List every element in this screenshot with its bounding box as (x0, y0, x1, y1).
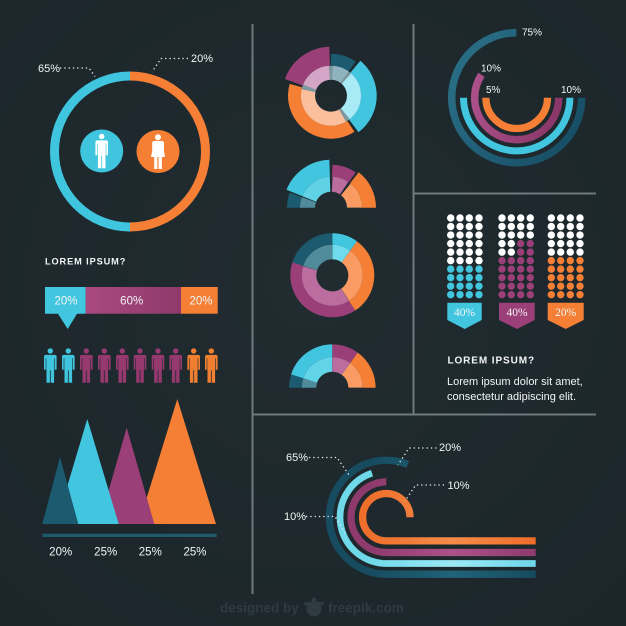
bar segment 20% orange (181, 287, 218, 314)
bar labels: 60% (120, 295, 143, 307)
footer credit (220, 598, 404, 616)
dot column 2 (502, 218, 530, 295)
triangle labels: 25% (94, 547, 117, 559)
callout: 10% right (405, 480, 470, 501)
bar labels (54, 295, 213, 307)
donut chart 3 (282, 225, 383, 326)
half donut chart 4 (281, 336, 384, 439)
arc: magenta (475, 56, 559, 140)
heading: lorem ipsum right: LOREM IPSUM? (448, 356, 535, 366)
callout: 20%: 20% (191, 53, 213, 65)
footer credit: freepik.com (328, 600, 404, 616)
ring: orange half (130, 76, 206, 227)
triangle labels: 25% (139, 547, 162, 559)
callout: 10% left: 10% (284, 511, 306, 523)
panel: dot columns with arrow tags (447, 218, 584, 329)
icon: male figure (80, 130, 123, 172)
ring: cyan half (54, 76, 130, 227)
callout: 10% right: 10% (448, 480, 470, 492)
callout: 65%: 65% (38, 63, 60, 75)
text block: description: consectetur adipiscing elit. (447, 391, 576, 403)
arc labels: 10% (561, 85, 581, 96)
bar segment 60% magenta (86, 287, 181, 314)
callout: 20%: 20% (439, 442, 461, 454)
bar labels: 20% (189, 295, 213, 307)
arc: cyan (464, 44, 570, 151)
triangle orange (139, 399, 216, 524)
panel: curved stripe chart (284, 442, 536, 574)
dot column 3 (551, 218, 580, 295)
text block: description (447, 376, 583, 403)
concentric arc chart top right (452, 28, 582, 163)
arc labels (481, 28, 581, 96)
arrow tag 40% cyan: 40% (454, 307, 475, 319)
arc: orange (486, 67, 548, 128)
heading: lorem ipsum left: LOREM IPSUM? (45, 256, 126, 266)
triangle chart (42, 399, 217, 559)
stripe: magenta (351, 482, 536, 552)
triangle cyan (56, 419, 119, 524)
triangle dark teal (42, 457, 78, 524)
callout: 65% (38, 63, 95, 76)
callout: 20% (398, 442, 461, 465)
icon: female figure (136, 130, 180, 173)
arc labels: 75% (522, 28, 542, 38)
triangle labels: 25% (183, 547, 207, 559)
triangle labels (49, 547, 207, 559)
stacked percent bar (45, 287, 218, 329)
footer credit: designed by (220, 600, 299, 616)
icon: freepik mascot (304, 598, 324, 616)
stripe: dark teal (329, 460, 536, 574)
arrow tag 40% magenta: 40% (506, 307, 528, 319)
callout: 65%: 65% (286, 452, 308, 464)
callout: 65% (286, 452, 349, 475)
callout: 10% left (284, 511, 345, 533)
callout: 20% (152, 53, 213, 72)
triangle magenta (99, 428, 154, 524)
pictogram row of ten people (44, 348, 218, 383)
arc: dark teal 75% (452, 33, 582, 163)
panel: gender ring chart (38, 53, 213, 227)
donut chart 1 (278, 42, 384, 149)
text block: description: Lorem ipsum dolor sit amet, (447, 376, 583, 388)
bar labels: 20% (54, 295, 78, 307)
triangle labels: 20% (49, 547, 72, 559)
baseline bar (42, 534, 217, 537)
arc labels: 5% (486, 85, 501, 96)
dot column 1 (451, 218, 479, 295)
arc labels: 10% (481, 64, 501, 74)
arrow tag 20% orange: 20% (555, 307, 577, 319)
half donut chart 2 (278, 154, 384, 261)
bar segment 20% cyan with pointer (45, 287, 86, 329)
stripe: orange (363, 494, 536, 541)
stripe: light cyan (340, 473, 536, 564)
